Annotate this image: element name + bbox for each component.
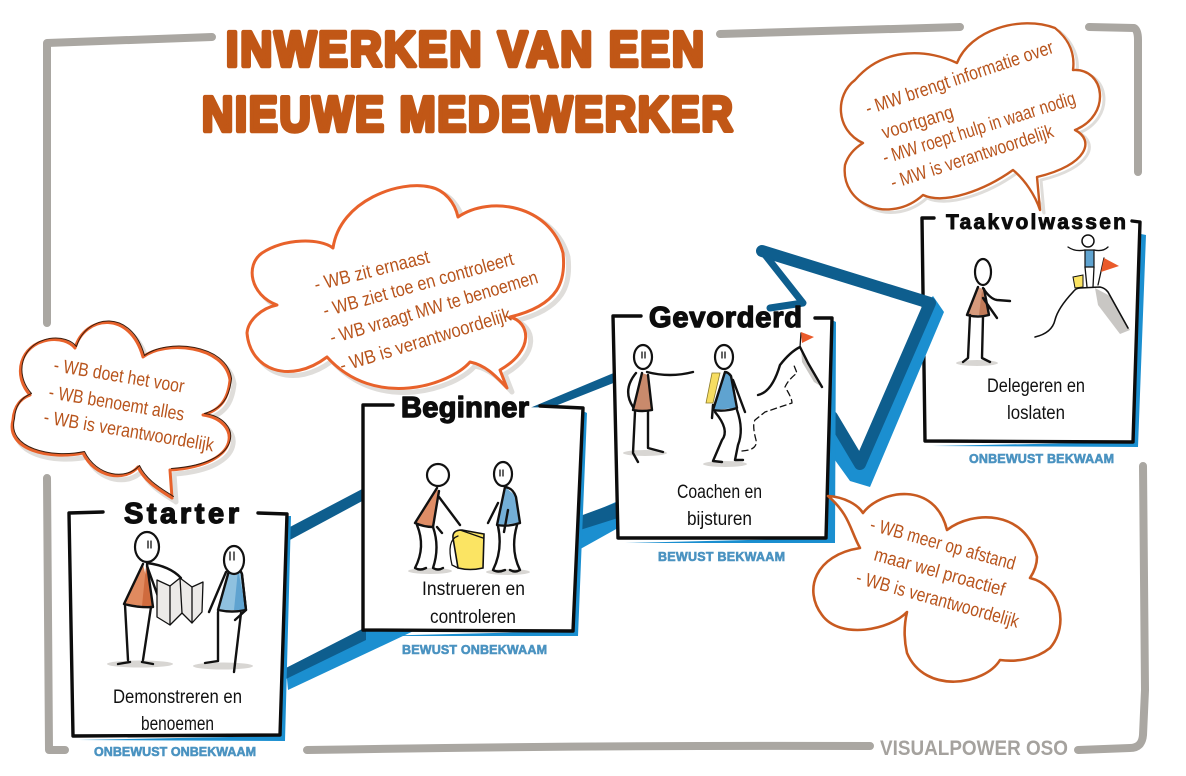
speech bubble: Beginner: - WB vraagt MW te benoemen <box>327 267 541 349</box>
title: INWERKEN VAN EEN <box>226 22 704 77</box>
speech bubble: Taakvolwassen <box>841 23 1104 213</box>
caption: Instrueren en controleren <box>422 579 525 628</box>
speech bubble: Beginner: - WB zit ernaast <box>312 247 432 296</box>
figures: coach pointing, person with backpack, mountain path <box>623 332 822 467</box>
big blue arrow <box>762 251 944 487</box>
staircase band: lower blue stripes <box>286 501 618 690</box>
box: Taakvolwassen <box>922 211 1146 447</box>
heading: Beginner: Beginner <box>401 392 529 424</box>
speech bubble: Taakvolwassen: - MW roept hulp in waar nodig <box>880 88 1078 169</box>
label: Bewust Onbekwaam: BEWUST ONBEKWAAM <box>402 643 547 657</box>
caption: Coachen en bijsturen: Coachen en <box>677 482 762 503</box>
caption: Demonstreren en benoemen <box>113 687 242 735</box>
speech bubble: Starter: - WB benoemt alles <box>47 382 186 426</box>
speech bubble: Beginner: - WB is verantwoordelijk <box>337 305 514 377</box>
label: Bewust Bekwaam: BEWUST BEKWAAM <box>658 550 785 564</box>
title <box>202 22 733 142</box>
staircase band: upper blue stripes <box>288 372 616 541</box>
box: Gevorderd <box>613 302 836 543</box>
speech bubble: Starter <box>12 321 234 502</box>
title: NIEUWE MEDEWERKER <box>202 86 733 142</box>
speech bubble: Gevorderd: maar wel proactief <box>872 545 1008 601</box>
speech bubble: Beginner <box>247 186 569 392</box>
speech bubble: Taakvolwassen: voortgang <box>879 102 956 144</box>
caption: Delegeren en loslaten <box>987 376 1085 424</box>
box: Beginner <box>363 392 587 636</box>
caption: Delegeren en loslaten: loslaten <box>1007 403 1065 424</box>
caption: Coachen en bijsturen: bijsturen <box>687 509 752 530</box>
label: Onbewust Onbekwaam: ONBEWUST ONBEKWAAM <box>94 745 256 759</box>
figures: person delegating, person on summit <box>956 235 1130 366</box>
caption: Delegeren en loslaten: Delegeren en <box>987 376 1085 397</box>
speech bubble: Gevorderd: - WB is verantwoordelijk <box>854 568 1022 633</box>
caption: Instrueren en controleren: Instrueren en <box>422 579 525 600</box>
caption: Demonstreren en benoemen: Demonstreren en <box>113 687 242 708</box>
heading: Gevorderd: Gevorderd <box>649 302 802 334</box>
caption: Instrueren en controleren: controleren <box>430 607 516 628</box>
heading: Starter: Starter <box>124 498 239 530</box>
caption: Coachen en bijsturen <box>677 482 762 530</box>
figures: two people with a backpack <box>408 462 530 575</box>
speech bubble: Starter: - WB doet het voor <box>52 355 186 398</box>
speech bubble: Taakvolwassen: - MW is verantwoordelijk <box>888 121 1057 194</box>
speech bubble: Starter: - WB is verantwoordelijk <box>42 407 216 456</box>
box: Starter <box>69 498 291 741</box>
heading: Taakvolwassen: Taakvolwassen <box>946 211 1126 234</box>
figures: two people reading a map <box>107 532 253 672</box>
speech bubble: Beginner: - WB ziet toe en controleert <box>321 249 517 322</box>
label: Onbewust Bekwaam: ONBEWUST BEKWAAM <box>969 452 1114 466</box>
speech bubble: Gevorderd: - WB meer op afstand <box>868 515 1018 575</box>
speech bubble: Taakvolwassen: - MW brengt informatie over <box>863 37 1057 120</box>
credit: Visualpower OSO: VISUALPOWER OSO <box>880 737 1068 760</box>
caption: Demonstreren en benoemen: benoemen <box>141 714 214 735</box>
speech bubble: Gevorderd <box>813 494 1060 682</box>
